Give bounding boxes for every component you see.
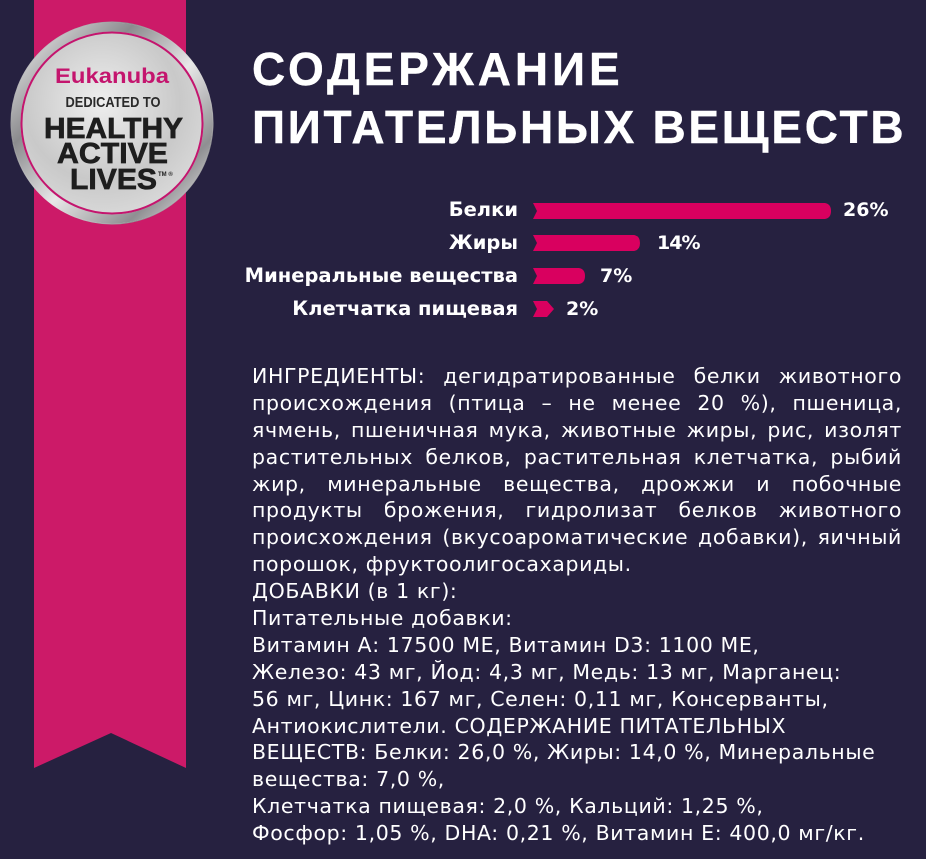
bar: Жиры — [533, 235, 640, 251]
value: 7%: 7% — [600, 265, 632, 287]
lives: LIVES — [70, 164, 157, 196]
value: 14%: 14% — [657, 232, 699, 254]
bar: Клетчатка пищевая — [533, 301, 554, 317]
ingredients text block: Железо: 43 мг, Йод: 4,3 мг, Медь: 13 мг, Марганец: — [252, 660, 841, 684]
ingredients text block: происхождения (вкусоароматические добавки), яичный — [252, 525, 902, 549]
value: 2%: 2% — [566, 298, 598, 320]
title: ПИТАТЕЛЬНЫХ ВЕЩЕСТВ — [252, 101, 906, 153]
dedicated to: DEDICATED TO — [66, 94, 161, 111]
ingredients text block: ВЕЩЕСТВ: Белки: 26,0 %, Жиры: 14,0 %, Минеральные — [252, 740, 875, 764]
outer metallic ring — [16, 27, 208, 219]
healthy: HEALTHY — [44, 113, 183, 145]
ingredients text block: растительных белков, растительная клетчатка, рыбий — [252, 445, 902, 469]
ingredients text block: жир, минеральные вещества, дрожжи и побочные — [252, 472, 902, 496]
ingredients text block: ДОБАВКИ (в 1 кг): — [252, 579, 457, 603]
bar: Минеральные вещества — [533, 268, 585, 284]
ingredients text block: продукты брожения, гидролизат белков животного — [252, 498, 902, 522]
ingredients text block: Фосфор: 1,05 %, DHA: 0,21 %, Витамин Е: 400,0 мг/кг. — [252, 821, 865, 845]
ingredients text block: происхождения (птица – не менее 20 %), пшеница, — [252, 391, 902, 415]
silver rim — [11, 22, 213, 224]
ingredients text block: Клетчатка пищевая: 2,0 %, Кальций: 1,25 %, — [252, 794, 763, 818]
ingredients text block — [252, 364, 902, 845]
title: СОДЕРЖАНИЕ — [252, 43, 624, 95]
brand name: Eukanuba — [55, 65, 169, 88]
ingredients text block: Питательные добавки: — [252, 606, 513, 630]
active: ACTIVE — [57, 138, 168, 170]
ingredients text block: ИНГРЕДИЕНТЫ: дегидратированные белки животного — [252, 364, 902, 388]
ingredients text block: вещества: 7,0 %, — [252, 767, 445, 791]
label: Жиры: Жиры — [449, 231, 518, 254]
bar: Белки — [533, 203, 831, 219]
value: 26%: 26% — [843, 199, 888, 221]
badge: Eukanuba seal — [10, 22, 214, 224]
label: Белки: Белки — [449, 198, 518, 221]
title — [252, 43, 906, 153]
label: Клетчатка пищевая: Клетчатка пищевая — [292, 297, 518, 320]
trademark: TM ® — [158, 171, 173, 178]
ingredients text block: Витамин А: 17500 МЕ, Витамин D3: 1100 МЕ, — [252, 633, 760, 657]
ingredients text block: порошок, фруктоолигосахариды. — [252, 552, 632, 576]
ingredients text block: Антиокислители. СОДЕРЖАНИЕ ПИТАТЕЛЬНЫХ — [252, 714, 786, 738]
ingredients text block: 56 мг, Цинк: 167 мг, Селен: 0,11 мг, Консерванты, — [252, 687, 829, 711]
ribbon — [34, 0, 186, 768]
ingredients text block: ячмень, пшеничная мука, животные жиры, рис, изолят — [252, 418, 902, 442]
pink inner ring — [22, 32, 202, 214]
label: Минеральные вещества: Минеральные вещества — [245, 264, 518, 287]
bar chart: nutrients — [245, 198, 888, 320]
